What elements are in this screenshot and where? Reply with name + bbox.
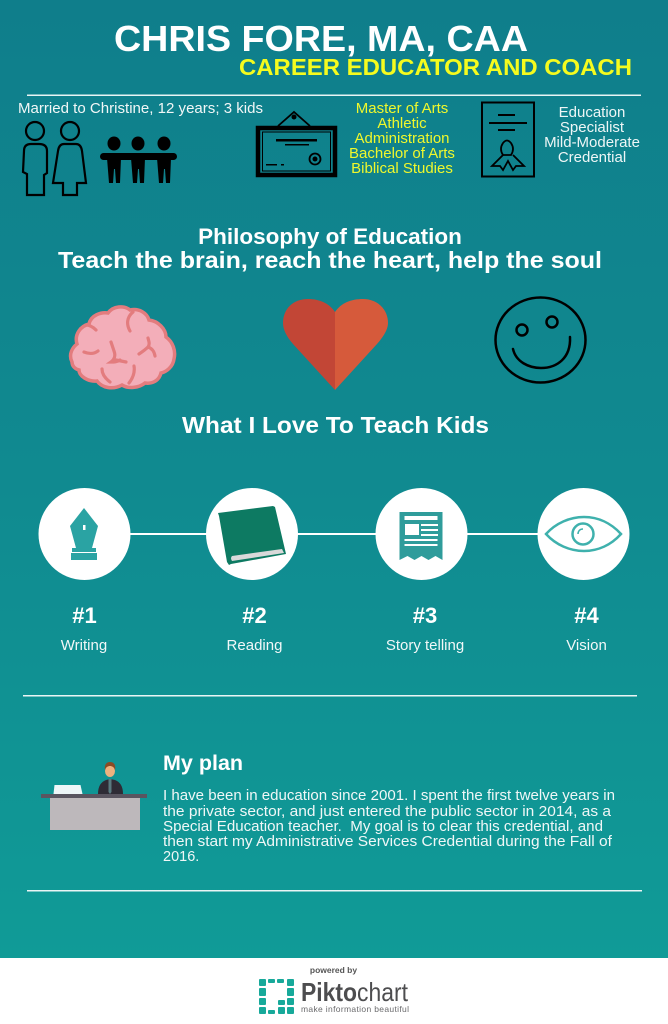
icon: person at desk	[41, 762, 147, 830]
icon: certificate with ribbon	[482, 102, 534, 176]
step 3: story telling	[376, 488, 468, 654]
section heading: What I Love To Teach Kids	[182, 412, 489, 438]
credential text: Mild-Moderate	[544, 134, 640, 151]
title: CHRIS FORE, MA, CAA	[114, 18, 528, 59]
step 3: story telling: Story telling	[386, 637, 464, 654]
step 1: writing: Writing	[61, 637, 107, 654]
icon: pen nib	[70, 508, 98, 560]
my plan heading: My plan	[163, 751, 243, 775]
philosophy heading: Teach the brain, reach the heart, help the soul	[58, 247, 602, 273]
footer: powered by Piktochart	[259, 965, 409, 1014]
my plan paragraph: the private sector, and just entered the public sector in 2014, as a	[163, 804, 612, 820]
family text: Married to Christine, 12 years; 3 kids	[18, 100, 263, 117]
footer: powered by Piktochart: powered by	[310, 965, 357, 975]
icon: three children	[100, 136, 177, 183]
my plan paragraph: 2016.	[163, 849, 199, 865]
degrees text: Bachelor of Arts	[349, 145, 455, 162]
step 1: writing	[38, 488, 130, 654]
icon: eye	[546, 517, 621, 551]
step 3: story telling: #3	[413, 603, 437, 628]
my plan paragraph: Special Education teacher. My goal is to clear this credential, and	[163, 819, 603, 835]
my plan paragraph	[163, 788, 615, 865]
degrees text: Athletic	[377, 115, 427, 132]
icon: green book	[218, 506, 286, 565]
step 4: vision	[538, 488, 630, 654]
step 2: reading: #2	[242, 603, 267, 628]
credential text: Credential	[558, 149, 626, 166]
degrees text	[349, 100, 455, 177]
icon: Piktochart logo	[259, 979, 294, 1014]
subtitle: CAREER EDUCATOR AND COACH	[239, 54, 632, 80]
credential text	[544, 104, 640, 166]
footer: powered by Piktochart: Piktochart	[301, 977, 409, 1007]
degrees text: Master of Arts	[356, 100, 448, 117]
my plan paragraph: I have been in education since 2001. I spent the first twelve years in	[163, 788, 615, 804]
icon: couple	[23, 122, 86, 195]
philosophy heading: Philosophy of Education	[198, 224, 462, 249]
icon: framed diploma	[258, 112, 335, 175]
step 4: vision: #4	[574, 603, 599, 628]
credential text: Education	[559, 104, 625, 121]
step 2: reading: Reading	[227, 637, 282, 654]
degrees text: Administration	[354, 130, 450, 147]
icon: smiley face	[496, 298, 586, 382]
my plan paragraph: then start my Administrative Services Credential during the Fall of	[163, 834, 613, 850]
step 4: vision: Vision	[566, 637, 607, 654]
icon: newspaper	[400, 512, 442, 560]
credential text: Specialist	[560, 119, 625, 136]
footer: powered by Piktochart: make information beautiful	[301, 1004, 409, 1014]
degrees text: Biblical Studies	[351, 160, 453, 177]
step 1: writing: #1	[72, 603, 97, 628]
icon: brain	[71, 307, 175, 388]
step 2: reading	[206, 488, 298, 654]
philosophy heading	[58, 224, 602, 273]
icon: heart	[283, 299, 388, 390]
